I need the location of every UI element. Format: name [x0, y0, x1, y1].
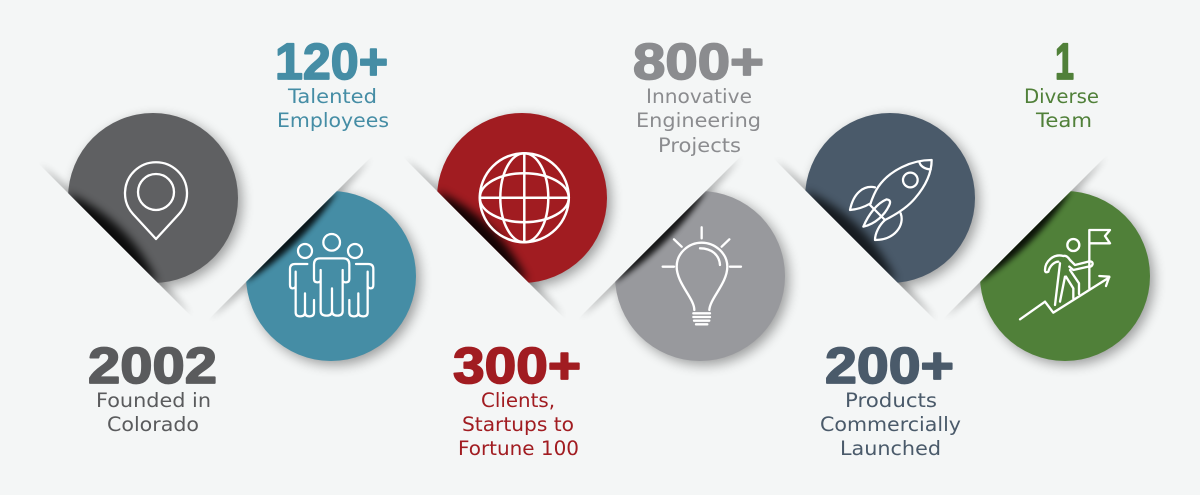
stat: 2002 founded: 2002 [88, 337, 217, 394]
stat: 2002 founded [88, 337, 217, 436]
stat: 800+ projects [633, 33, 764, 157]
stat: 2002 founded: Founded in [96, 389, 211, 412]
icon: rocket [850, 160, 932, 240]
stat: 120+ employees [275, 33, 389, 132]
stat: 200+ products [820, 337, 961, 460]
stat: 300+ clients: 300+ [453, 337, 581, 394]
panel: products circle [775, 113, 979, 320]
panel: team circle [945, 157, 1154, 365]
stat: 1 diverse team: Team [1035, 109, 1092, 132]
panel: employees circle [210, 158, 420, 365]
panel: clients circle [405, 113, 611, 317]
stat: 300+ clients: Startups to [462, 413, 574, 436]
icon: people [290, 234, 373, 316]
stat: 1 diverse team: 1 [1055, 33, 1074, 90]
stat: 120+ employees: 120+ [275, 33, 388, 90]
icon: light bulb [663, 227, 741, 324]
stat: 120+ employees: Talented [287, 85, 377, 108]
icon: location pin [125, 162, 187, 239]
stat: 300+ clients: Fortune 100 [458, 437, 579, 460]
stat: 200+ products: Products [845, 389, 937, 412]
stat: 800+ projects: Innovative [646, 85, 752, 108]
stat: 800+ projects: 800+ [633, 33, 764, 90]
stat: 800+ projects: Projects [658, 134, 741, 157]
icon: globe [480, 153, 569, 242]
stat: 800+ projects: Engineering [636, 109, 761, 132]
stat: 200+ products: Launched [840, 437, 941, 460]
stat: 200+ products: 200+ [825, 337, 954, 394]
stat: 120+ employees: Employees [277, 109, 389, 132]
stat: 200+ products: Commercially [820, 413, 961, 436]
stat: 1 diverse team: Diverse [1024, 85, 1099, 108]
panel: founded circle [40, 113, 242, 315]
stat: 2002 founded: Colorado [107, 413, 199, 436]
stat: 300+ clients: Clients, [481, 389, 555, 412]
stat: 300+ clients [453, 337, 581, 460]
stat: 1 diverse team [1024, 33, 1099, 132]
icon: climber with flag [1020, 230, 1110, 319]
panel: projects circle [580, 157, 789, 365]
